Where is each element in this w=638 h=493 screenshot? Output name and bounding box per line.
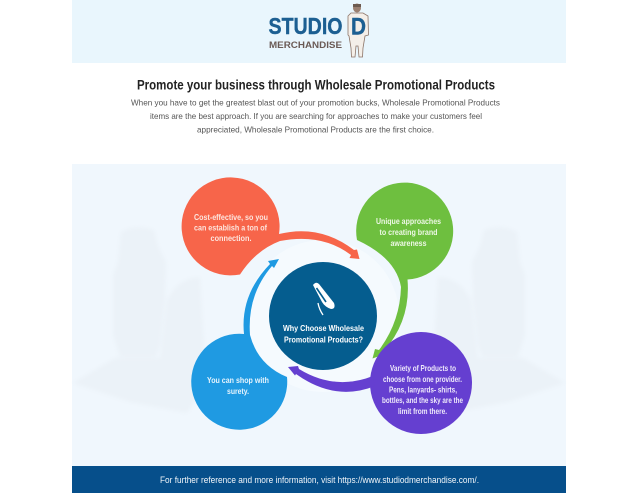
center heading: Why Choose Wholesale <box>283 323 364 333</box>
intro paragraph: When you have to get the greatest blast out of your promotion bucks, Wholesale Promotional Products <box>131 98 500 108</box>
header band <box>72 0 566 63</box>
text: unique approaches: awareness <box>390 238 427 248</box>
infographic panel background <box>72 164 566 466</box>
text: unique approaches: to creating brand <box>380 227 438 237</box>
center heading <box>283 323 364 344</box>
step: shop with surety blue circle with arrow <box>191 259 287 430</box>
step: variety of products purple circle <box>370 332 472 434</box>
watermark: right bag <box>423 227 565 413</box>
logo: Studio D Merchandise <box>268 4 368 57</box>
logo wordmark: MERCHANDISE: MERCHANDISE <box>269 40 342 51</box>
footer band <box>72 466 566 493</box>
text: unique approaches <box>376 216 441 248</box>
logo figure: man with D on shirt: D <box>351 14 366 40</box>
intro paragraph: items are the best approach. If you are searching for approaches to make your customers feel <box>150 111 482 121</box>
title: Promote your business through Wholesale Promotional Products <box>137 78 495 92</box>
text: cost-effective: connection. <box>210 233 252 243</box>
text: variety of products: bottles, and the sky are the <box>382 395 463 405</box>
intro paragraph <box>131 98 500 135</box>
text: shop with surety: You can shop with <box>207 375 269 385</box>
center circle <box>269 262 377 370</box>
text: variety of products: Pens, lanyards- shirts, <box>389 384 457 394</box>
text: cost-effective: Cost-effective, so you <box>194 212 268 222</box>
step: unique approaches green circle with arrow <box>356 183 453 358</box>
watermark: left bag <box>73 227 215 413</box>
text: variety of products: limit from there. <box>398 406 447 416</box>
logo wordmark: STUDIO: STUDIO <box>268 13 342 39</box>
text: variety of products: Variety of Products to <box>390 363 456 373</box>
text: shop with surety: surety. <box>227 386 249 396</box>
arrow: purple to blue <box>288 366 375 392</box>
icon: lanyard <box>313 283 335 315</box>
center heading: Promotional Products? <box>284 334 363 344</box>
text: variety of products <box>382 363 463 416</box>
inner ring highlight <box>247 240 399 392</box>
text: shop with surety <box>207 375 269 396</box>
step: cost-effective red circle with arrow <box>182 177 360 275</box>
text: cost-effective: can establish a ton of <box>194 222 267 232</box>
intro paragraph: appreciated, Wholesale Promotional Products are the first choice. <box>197 125 434 135</box>
text: unique approaches: Unique approaches <box>376 216 441 226</box>
watermark: golf bags left and right <box>73 227 565 413</box>
footer text: For further reference and more information, visit https://www.studiodmerchandise.com/. <box>160 475 479 485</box>
text: cost-effective <box>194 212 268 243</box>
text: variety of products: choose from one provider. <box>383 374 462 384</box>
